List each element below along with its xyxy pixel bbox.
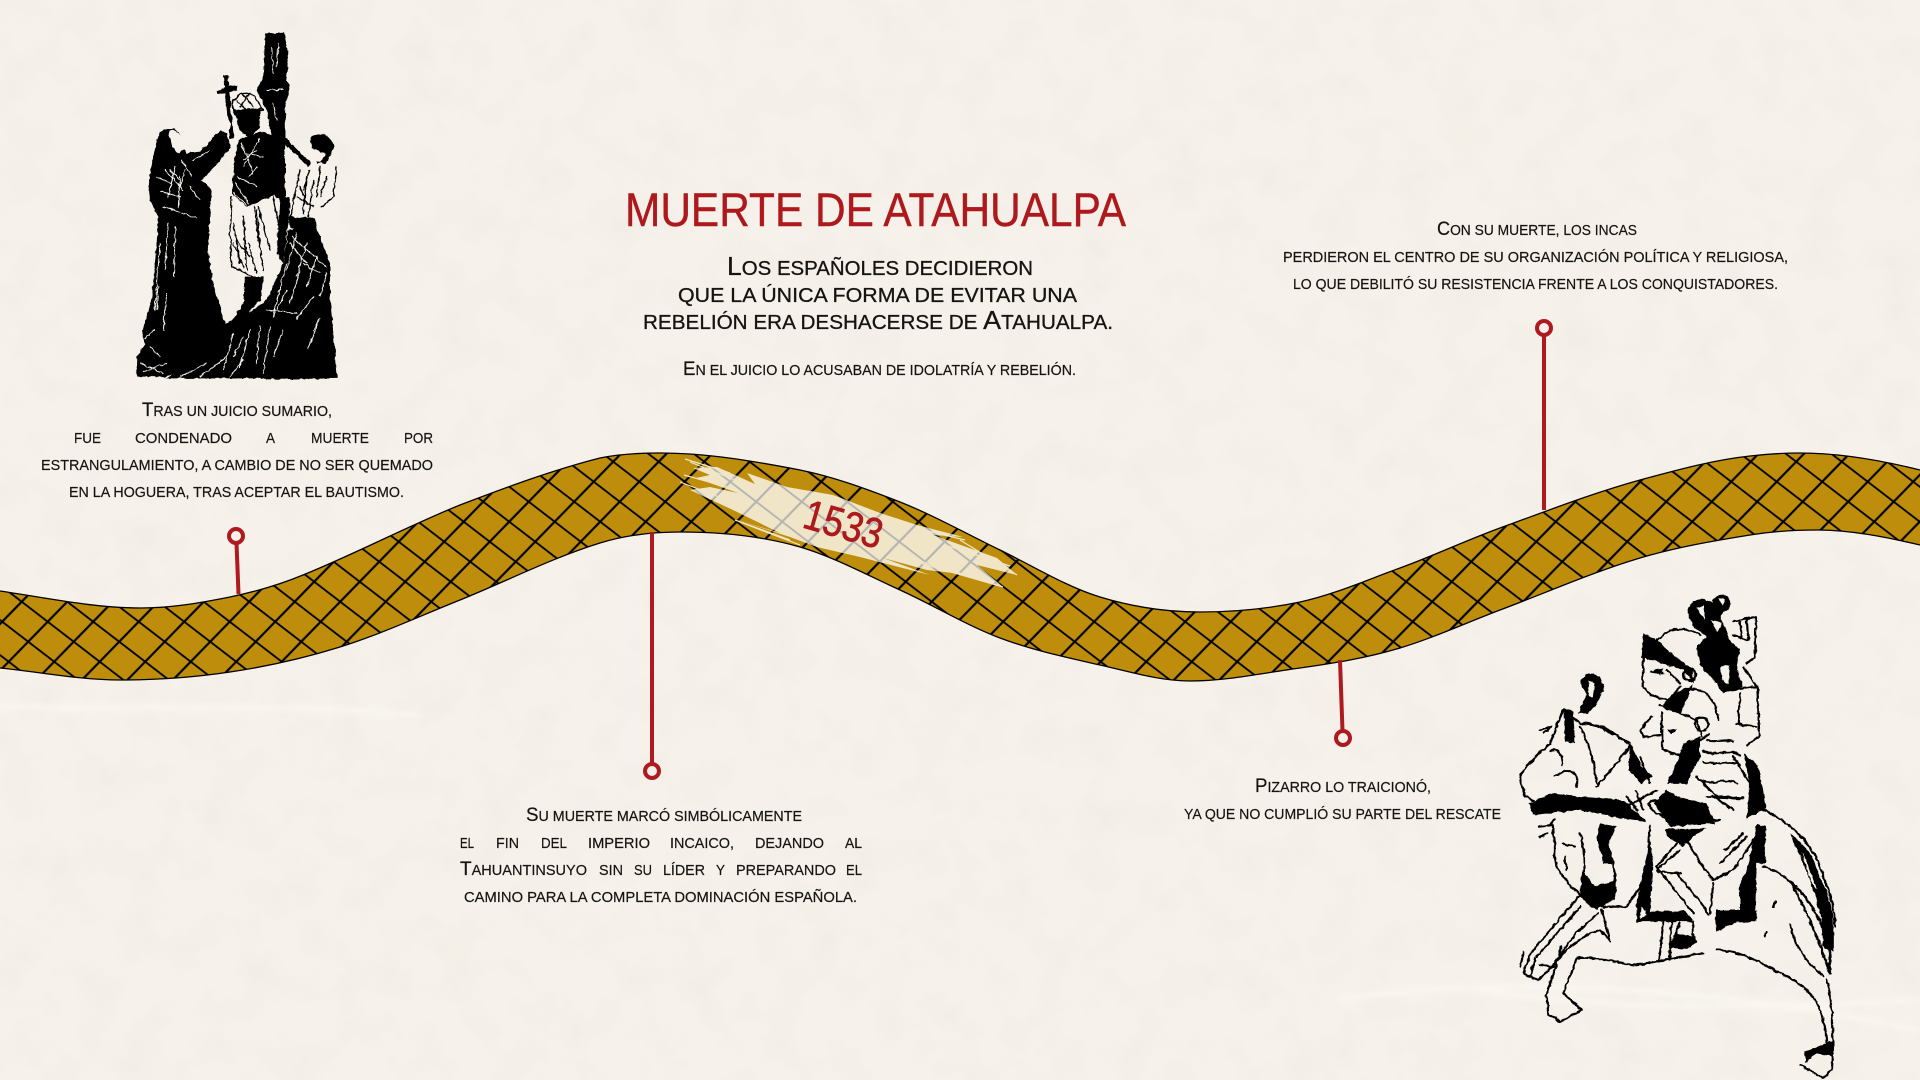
text block: betrayal xyxy=(1184,776,1501,823)
text block: end of empire: INCAICO, xyxy=(670,836,734,852)
text block: sentence xyxy=(41,400,433,501)
text block: loss of organization: LO QUE DEBILITÓ SU RESISTENCIA FRENTE A LOS CONQUISTADORES. xyxy=(1293,276,1778,293)
text block: end of empire: IMPERIO xyxy=(588,836,650,852)
text block: end of empire: Y xyxy=(716,863,725,879)
title: MUERTE DE ATAHUALPA xyxy=(625,183,1127,236)
main statement: QUE LA ÚNICA FORMA DE EVITAR UNA xyxy=(678,284,1078,307)
text block: end of empire: SU MUERTE MARCÓ SIMBÓLICAMENTE xyxy=(526,805,802,826)
text block: sentence: POR xyxy=(404,431,433,447)
text block: sentence: CONDENADO xyxy=(135,431,232,447)
text block: end of empire: FIN xyxy=(496,836,519,852)
main statement: REBELIÓN ERA DESHACERSE DE ATAHUALPA. xyxy=(643,305,1113,335)
text block: end of empire: EL xyxy=(846,863,862,879)
text block: end of empire: TAHUANTINSUYO xyxy=(460,859,587,880)
text block: sentence: MUERTE xyxy=(311,431,369,447)
text block: sentence: EN LA HOGUERA, TRAS ACEPTAR EL BAUTISMO. xyxy=(69,485,404,501)
text block: end of empire: SU xyxy=(634,863,652,879)
main statement: LOS ESPAÑOLES DECIDIERON xyxy=(727,251,1033,281)
text block: end of empire: SIN xyxy=(599,863,623,879)
text block: loss of organization: CON SU MUERTE, LOS INCAS xyxy=(1437,219,1637,240)
text block: sentence: FUE xyxy=(74,431,101,447)
marker pin 4 xyxy=(1336,660,1350,745)
text block: sentence: A xyxy=(266,431,275,447)
text block: end of empire: CAMINO PARA LA COMPLETA DOMINACIÓN ESPAÑOLA. xyxy=(464,889,857,906)
text block: end of empire: DEL xyxy=(541,836,567,852)
text block: end of empire xyxy=(460,805,862,906)
trial note: EN EL JUICIO LO ACUSABAN DE IDOLATRÍA Y REBELIÓN. xyxy=(683,359,1076,380)
text block: sentence: ESTRANGULAMIENTO, A CAMBIO DE NO SER QUEMADO xyxy=(41,458,433,474)
text block: end of empire: LÍDER xyxy=(663,862,705,879)
text block: sentence: TRAS UN JUICIO SUMARIO, xyxy=(142,400,332,421)
text block: betrayal: PIZARRO LO TRAICIONÓ, xyxy=(1255,776,1431,797)
text block: end of empire: PREPARANDO xyxy=(736,863,836,879)
marker pin 1 xyxy=(229,529,243,594)
illustration: mounted conquistadors xyxy=(1520,595,1835,1078)
text block: loss of organization xyxy=(1283,219,1788,293)
timeline ribbon xyxy=(0,452,1920,682)
text block: end of empire: EL xyxy=(460,836,474,852)
year label 1533: 1533 xyxy=(799,490,888,558)
marker pin 2 xyxy=(645,532,659,778)
main statement xyxy=(643,251,1113,335)
marker pin 3 xyxy=(1537,321,1551,510)
brush stroke highlight behind year xyxy=(680,458,1018,588)
illustration: execution of Atahualpa xyxy=(137,33,337,379)
text block: end of empire: DEJANDO xyxy=(755,836,824,852)
text block: loss of organization: PERDIERON EL CENTRO DE SU ORGANIZACIÓN POLÍTICA Y RELIGIOSA, xyxy=(1283,249,1788,266)
text block: betrayal: YA QUE NO CUMPLIÓ SU PARTE DEL RESCATE xyxy=(1184,806,1501,823)
text block: end of empire: AL xyxy=(845,836,862,852)
